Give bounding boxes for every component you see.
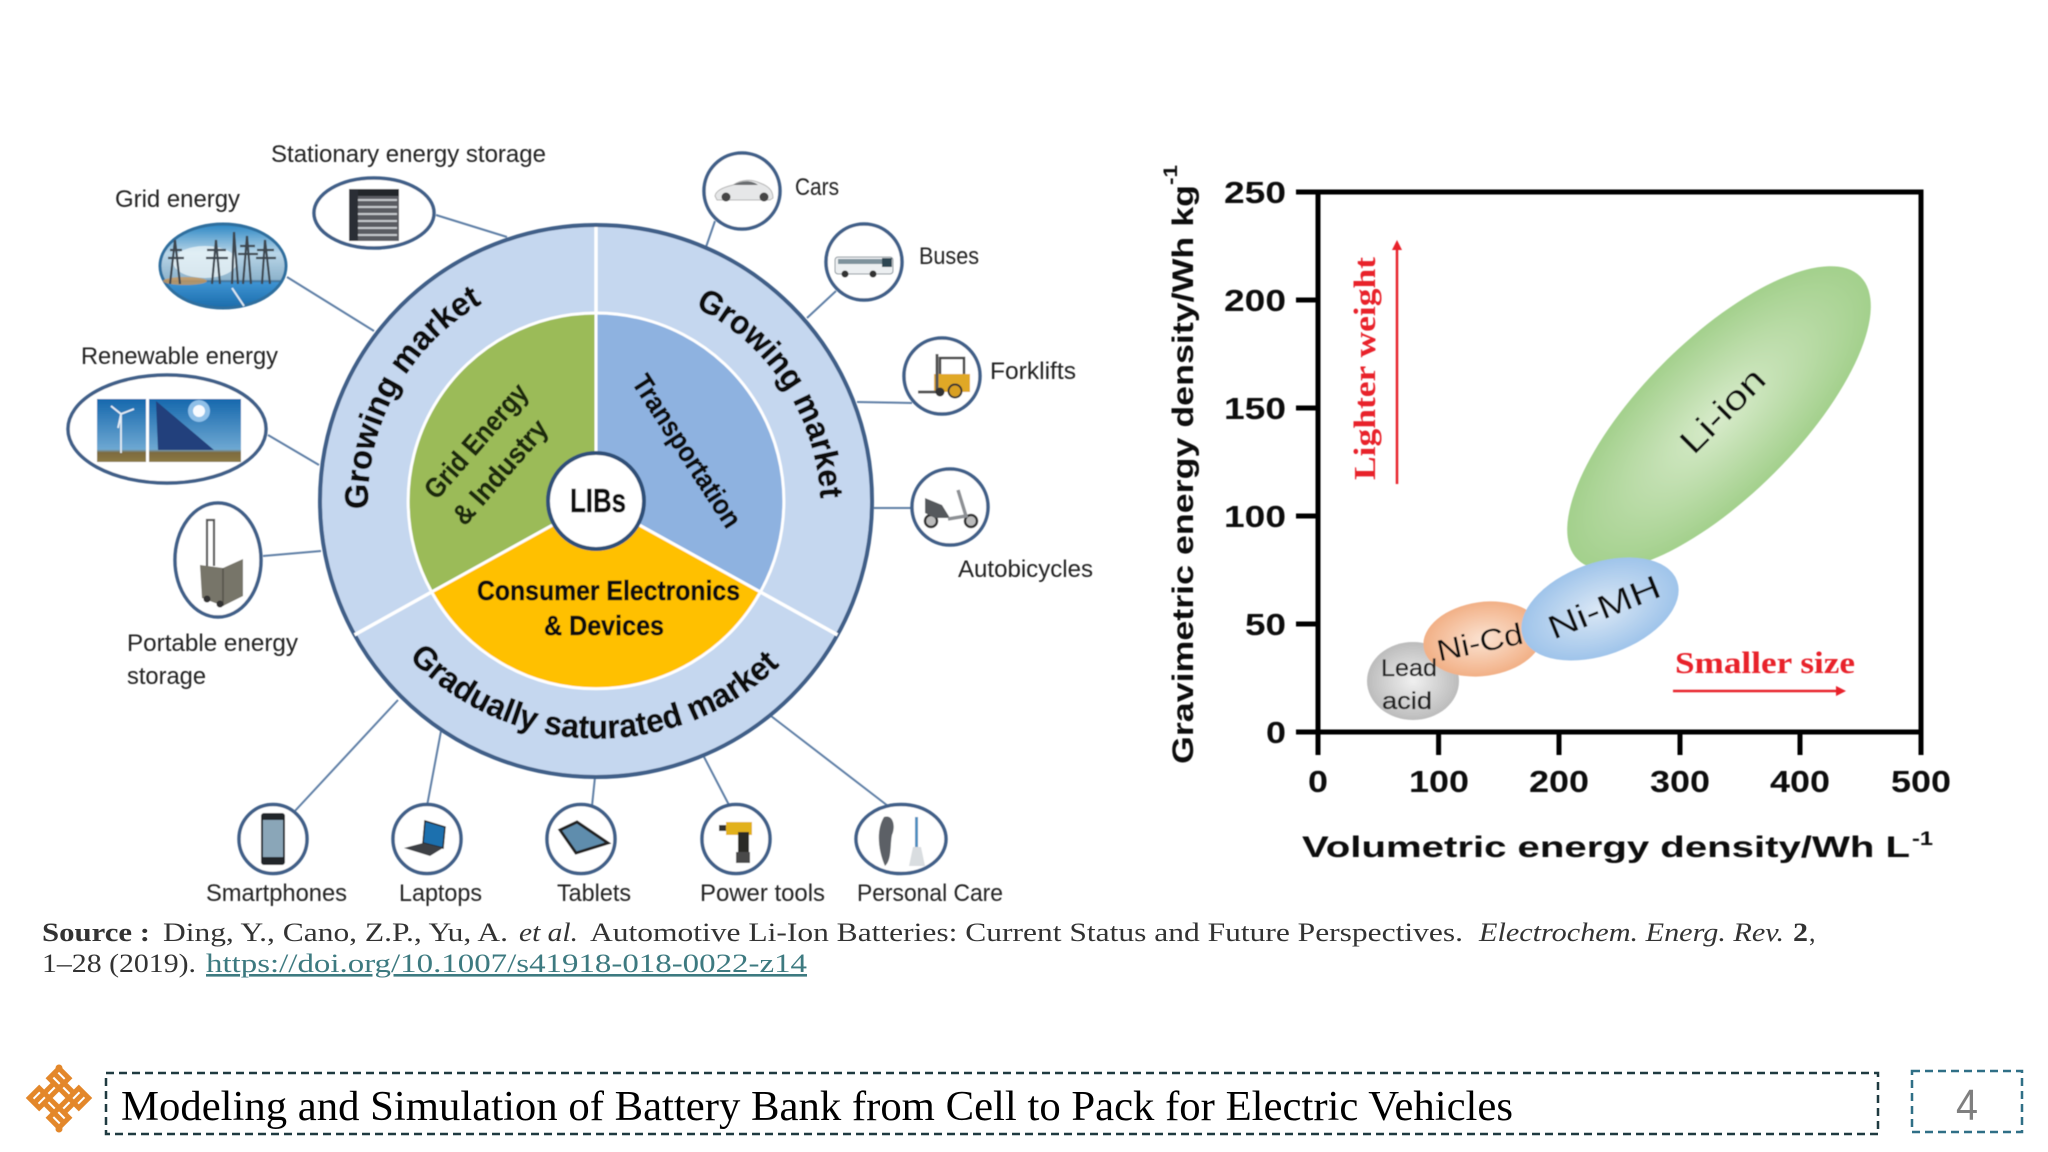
application: cars: Cars — [795, 174, 839, 201]
segment label: consumer electronics and devices — [477, 575, 740, 641]
panel: energy density chart — [1161, 165, 1951, 864]
source citation: Automotive Li-Ion Batteries: Current Status and Future Perspectives. — [590, 918, 1463, 947]
y-axis title — [1161, 165, 1200, 764]
center label: LIBs: LIBs — [570, 482, 626, 519]
page number box — [1912, 1071, 2022, 1132]
source citation: Ding, Y., Cano, Z.P., Yu, A. — [163, 918, 508, 947]
icon: orange endless knot logo — [29, 1064, 89, 1132]
segment label: consumer electronics and devices: Consumer Electronics — [477, 575, 740, 606]
x-axis title — [1302, 829, 1934, 864]
ring label: gradually saturated market: Gradually saturated market — [412, 646, 780, 740]
ellipse: lead acid — [1367, 642, 1459, 720]
ellipse: Ni-MH — [1507, 538, 1693, 680]
application: forklifts: Forklifts — [990, 358, 1076, 385]
page number box: 4 — [1956, 1081, 1978, 1130]
source citation: https://doi.org/10.1007/s41918-018-0022-z14 — [206, 949, 807, 978]
panel: LIB applications wheel diagram — [65, 141, 1093, 907]
application: personal care — [856, 804, 1003, 907]
application: autobicycles: Autobicycles — [958, 556, 1093, 583]
x-axis title: Volumetric energy density/Wh L — [1302, 831, 1910, 864]
application: portable energy storage — [127, 503, 298, 690]
x-axis tick labels — [1308, 764, 1951, 799]
application: power tools: Power tools — [700, 880, 825, 907]
source citation: Source : — [42, 918, 150, 947]
application: buses — [826, 224, 979, 300]
x-axis tick labels: 200 — [1529, 764, 1589, 799]
x-axis tick labels: 0 — [1308, 764, 1328, 799]
annotation: smaller size arrow — [1673, 645, 1855, 696]
connector lines — [263, 215, 912, 812]
title box — [106, 1073, 1878, 1134]
source citation: et al. — [519, 918, 578, 947]
label: lead acid: acid — [1382, 688, 1432, 715]
label: lead acid — [1381, 655, 1437, 715]
y-axis tick labels: 100 — [1224, 499, 1286, 534]
title box: Modeling and Simulation of Battery Bank from Cell to Pack for Electric Vehicles — [121, 1084, 1513, 1130]
x-axis tick labels: 400 — [1770, 764, 1830, 799]
y-axis tick labels: 250 — [1224, 175, 1286, 210]
x-axis tick labels: 500 — [1891, 764, 1951, 799]
segment label: grid energy and industry: Grid Energy — [418, 377, 535, 505]
annotation: lighter weight arrow: Lighter weight — [1347, 256, 1382, 480]
annotation: smaller size arrow: Smaller size — [1675, 645, 1855, 680]
ellipse: Ni-Cd: Ni-Cd — [1434, 618, 1526, 668]
source citation: , — [1809, 918, 1816, 947]
application: renewable energy — [68, 343, 278, 483]
annotation: lighter weight arrow — [1347, 240, 1402, 484]
application: autobicycles — [912, 469, 1093, 583]
source citation: Electrochem. Energ. Rev. — [1478, 918, 1784, 947]
application: grid energy: Grid energy — [115, 186, 240, 213]
y-axis title: Gravimetric energy density/Wh kg — [1167, 185, 1200, 764]
application: laptops: Laptops — [399, 880, 482, 907]
source citation — [42, 918, 1816, 978]
ring label: growing market left: Growing market — [344, 286, 482, 508]
y-axis tick labels: 200 — [1224, 283, 1286, 318]
application: smartphones — [206, 804, 347, 907]
inner segment: consumer electronics — [432, 501, 760, 689]
ellipse: Ni-Cd — [1418, 594, 1548, 684]
application: buses: Buses — [919, 243, 979, 270]
ring label: growing market right: Growing market — [698, 290, 842, 500]
application: smartphones: Smartphones — [206, 880, 347, 907]
application: laptops — [393, 804, 482, 907]
segment label: grid energy and industry: & Industry — [446, 413, 554, 531]
segment label: transportation: Transportation — [626, 369, 748, 533]
x-axis title: -1 — [1912, 829, 1934, 850]
source citation: 2 — [1793, 918, 1808, 947]
application: forklifts — [904, 338, 1076, 414]
segment label: consumer electronics and devices: & Devices — [544, 610, 664, 641]
application: grid energy — [115, 186, 286, 308]
application: renewable energy: Renewable energy — [81, 343, 278, 370]
y-axis tick labels: 0 — [1266, 715, 1286, 750]
application: portable energy storage: Portable energy — [127, 630, 298, 657]
application: stationary energy storage — [271, 141, 546, 248]
center circle — [548, 453, 644, 549]
label: lead acid: Lead — [1381, 655, 1437, 682]
inner segment: transportation — [596, 313, 784, 592]
outer market ring — [320, 225, 872, 777]
ellipse: Li-ion — [1522, 221, 1916, 615]
application: cars — [704, 153, 839, 229]
application: stationary energy storage: Stationary energy storage — [271, 141, 546, 168]
inner segment: grid energy and industry — [408, 313, 596, 592]
y-axis tick labels — [1224, 175, 1286, 750]
application: power tools — [700, 804, 825, 907]
y-axis tick labels: 150 — [1224, 391, 1286, 426]
application: portable energy storage: storage — [127, 663, 206, 690]
application: tablets — [547, 804, 631, 907]
y-axis tick labels: 50 — [1245, 607, 1286, 642]
x-axis tick labels: 300 — [1650, 764, 1710, 799]
axes and ticks — [1296, 192, 1921, 755]
application: tablets: Tablets — [557, 880, 631, 907]
ellipse: Ni-MH: Ni-MH — [1542, 568, 1666, 646]
x-axis tick labels: 100 — [1409, 764, 1469, 799]
ellipse: Li-ion: Li-ion — [1672, 360, 1774, 462]
y-axis title: -1 — [1161, 165, 1182, 185]
application: personal care: Personal Care — [857, 880, 1003, 907]
source citation: 1–28 (2019). — [42, 949, 196, 978]
